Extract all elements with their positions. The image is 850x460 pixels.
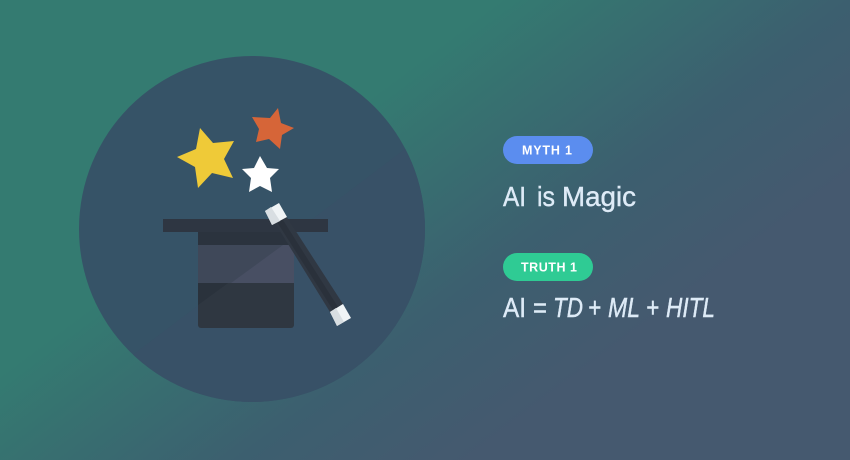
- wand top tip: [265, 203, 287, 225]
- truth badge: [503, 253, 593, 281]
- truth heading: +: [646, 292, 659, 323]
- truth badge: TRUTH 1: [521, 260, 577, 274]
- myth heading: AI: [503, 181, 526, 212]
- icon: magic hat: [163, 219, 328, 328]
- hat body: [198, 232, 294, 328]
- icon: magic wand: [265, 203, 351, 326]
- myth heading: Magic: [562, 181, 636, 212]
- hat brim: [163, 219, 328, 232]
- truth heading: ML: [608, 292, 640, 323]
- myth badge: MYTH 1: [522, 144, 572, 158]
- truth heading: +: [588, 292, 601, 323]
- truth heading: AI: [503, 292, 526, 323]
- icon: orange star: [252, 108, 294, 149]
- myth badge: [503, 136, 593, 164]
- wand bottom tip: [330, 304, 351, 326]
- icon: white star: [242, 156, 279, 192]
- wand shaft: [275, 216, 343, 312]
- truth heading: =: [533, 292, 547, 323]
- icon: yellow star: [177, 128, 234, 188]
- truth heading: TD: [553, 292, 583, 323]
- myth heading: [503, 181, 636, 212]
- truth heading: [503, 292, 715, 323]
- myth heading: is: [537, 181, 555, 212]
- panel: circle: [79, 56, 425, 402]
- truth heading: HITL: [666, 292, 715, 323]
